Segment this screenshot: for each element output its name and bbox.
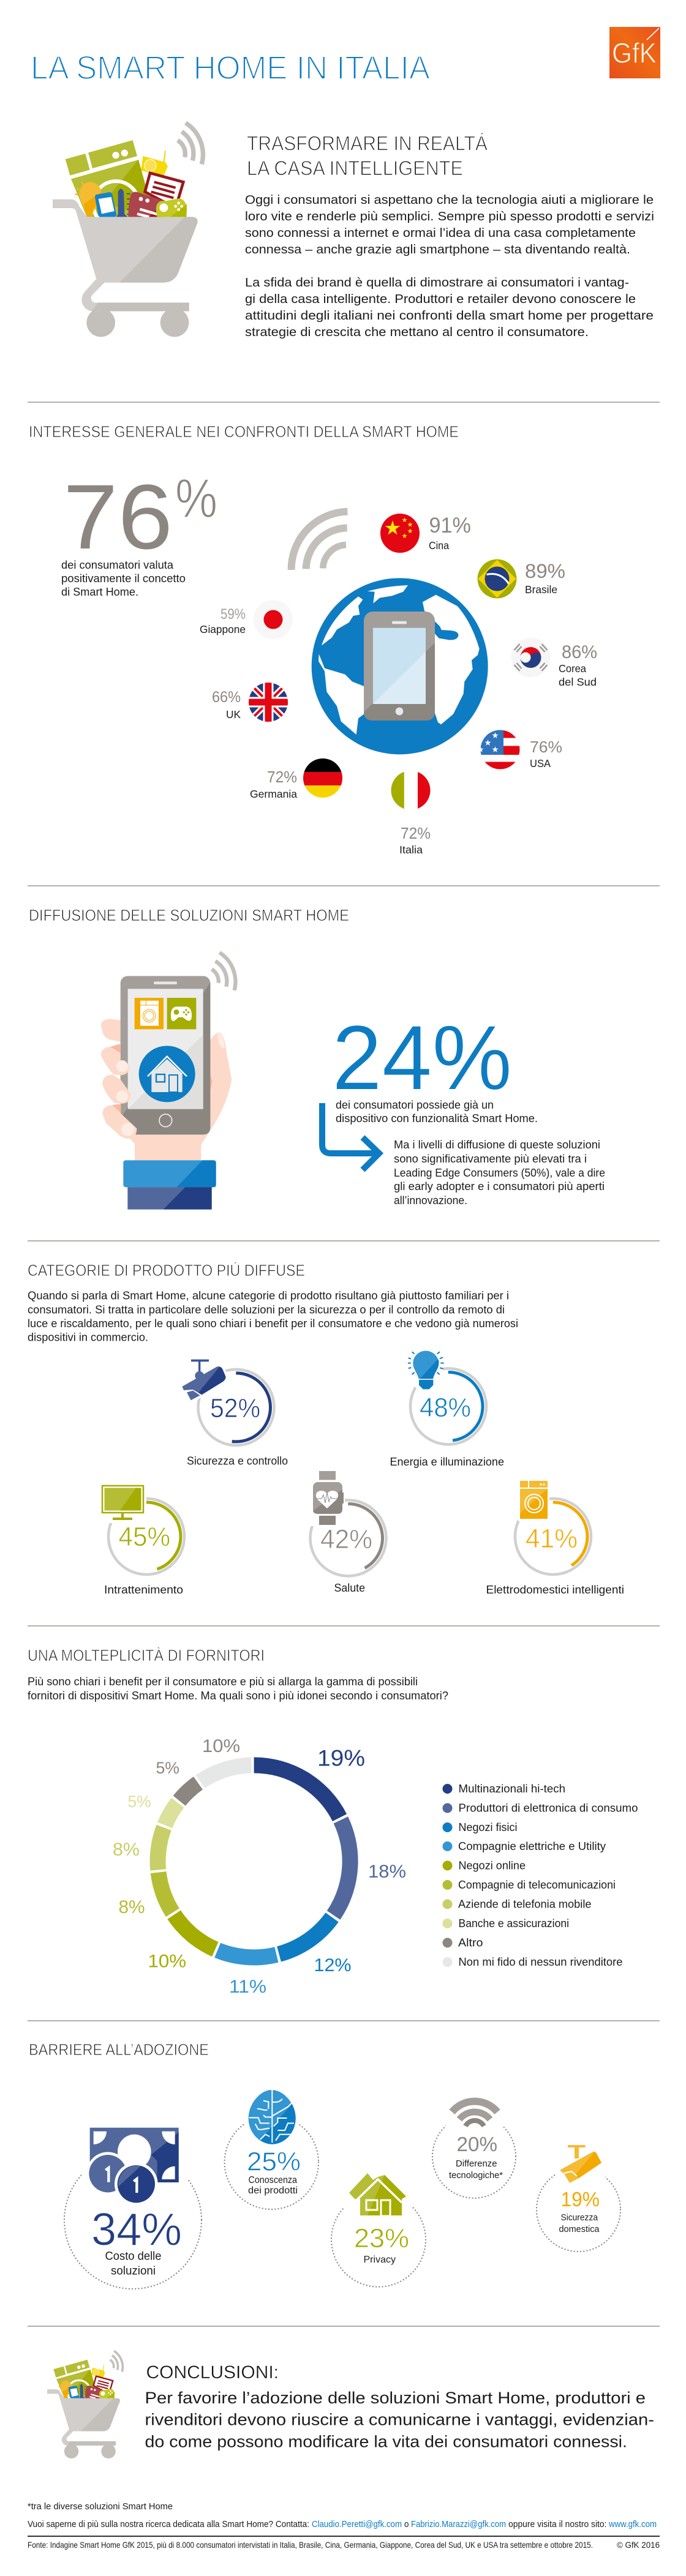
icon: smart watch [311,1470,345,1526]
flag: Brasile [478,560,517,599]
text: categorie intro: Quando si parla di Smart Home, alcune categorie di prodotto risultano già piuttosto familiari per i [28,1289,509,1301]
donut value labels: 5% [156,1759,179,1777]
contact line [28,2520,657,2529]
donut legend: Negozi online [458,1859,526,1872]
donut legend: Altro [458,1936,483,1949]
contact line: oppure visita il nostro sito: [508,2520,606,2529]
donut value labels: 8% [113,1840,140,1860]
icon: brain [244,2086,300,2147]
conclusions text: rivenditori devono riuscire a comunicarne i vantaggi, evidenzian- [145,2411,654,2429]
donut value labels: 5% [127,1792,151,1811]
icon: banknote and coins [81,2122,188,2206]
ring: elettrodomestici 41% [486,1499,624,1596]
text: categorie intro [28,1289,518,1343]
barrier: costo delle soluzioni 34% [91,2204,182,2277]
donut legend [442,1782,638,1968]
barrier: privacy 23%: 23% [354,2223,409,2253]
donut chart [158,1765,350,1958]
stat: 76%: % [175,468,217,530]
source line: Fonte: Indagine Smart Home GfK 2015, più di 8.000 consumatori intervistati in Italia, Brasile, Cina, Germania, Giappone, Corea del Sud, UK e USA tra settembre e ottobre 2015. [28,2540,593,2550]
icon: light bulb [408,1347,444,1391]
arrow [322,1103,379,1170]
label: Cina [429,514,471,552]
flag: Italia [391,771,430,809]
conclusions text: do come possono modificare la vita dei consumatori connessi. [145,2433,627,2451]
donut legend: Multinazionali hi-tech [458,1782,565,1795]
barrier: costo delle soluzioni 34%: soluzioni [111,2265,156,2277]
label: Giappone: 59% [221,606,246,623]
barrier: conoscenza dei prodotti 25%: Conoscenza [249,2175,297,2185]
logo: GfK [609,27,660,78]
ring: salute 42%: 42% [320,1524,372,1554]
text: 24% caption [336,1098,538,1125]
donut legend: Produttori di elettronica di consumo [458,1801,638,1814]
flag: Giappone [254,600,293,639]
donut value labels: 19% [317,1746,365,1770]
text: 24% caption: dispositivo con funzionalità Smart Home. [336,1112,538,1125]
text: leading edge consumers: sono significativamente più elevati tra i [394,1152,587,1165]
label: Cina: Cina [429,539,449,552]
barrier: privacy 23%: Privacy [364,2255,396,2265]
flag: Germania [303,758,343,798]
label: Italia [399,824,431,856]
icon: wifi arcs [292,512,347,570]
text: leading edge consumers: Ma i livelli di diffusione di queste soluzioni [394,1138,600,1151]
ring: elettrodomestici 41%: 41% [526,1524,578,1554]
label: USA: 76% [530,738,562,756]
title: LA SMART HOME IN ITALIA [31,50,430,86]
icon: wifi up [446,2094,503,2132]
conclusions heading: CONCLUSIONI: [146,2362,279,2383]
intro text: La sfida dei brand è quella di dimostrare ai consumatori i vantag- [245,275,629,290]
logo: GfK: GfK [612,37,657,69]
stat: 24%: 24% [332,1006,512,1109]
text: 24% caption: dei consumatori possiede già un [336,1098,494,1111]
label: Corea del Sud: del Sud [559,676,597,688]
heading: interesse generale: INTERESSE GENERALE NEI CONFRONTI DELLA SMART HOME [29,422,459,441]
donut value labels: 8% [119,1897,145,1917]
contact line: Claudio.Peretti@gfk.com [312,2520,402,2529]
icon: shopping cart with smart devices [53,123,203,337]
donut legend: Non mi fido di nessun rivenditore [458,1955,622,1968]
donut value labels [113,1736,406,1997]
donut legend: Negozi fisici [458,1821,517,1833]
label: Brasile: Brasile [525,583,557,596]
intro heading [247,132,488,179]
ring: energia e illuminazione 48%: 48% [420,1393,471,1423]
flag: USA [480,730,519,769]
stat: 76%: positivamente il concetto [61,572,186,585]
flag: Cina [380,514,420,553]
contact line: Fabrizio.Marazzi@gfk.com [411,2520,506,2529]
intro text: attitudini degli italiani nei confronti della smart home per progettare [245,309,654,323]
ring: energia e illuminazione 48% [390,1369,504,1468]
stat: 76%: 76 [63,465,173,568]
label: Giappone: Giappone [200,623,246,635]
icon: security camera [182,1360,225,1400]
barrier: sicurezza domestica 19%: 19% [561,2188,600,2211]
text: leading edge consumers: gli early adopter e i consumatori più aperti [394,1180,605,1193]
barrier: differenze tecnologiche 20%: 20% [457,2133,497,2155]
flag: Corea del Sud [511,638,550,677]
label: Giappone [200,606,246,635]
intro text: Oggi i consumatori si aspettano che la tecnologia aiuti a migliorare le [245,193,654,207]
donut legend: Compagnie elettriche e Utility [458,1840,606,1852]
barrier: differenze tecnologiche 20%: Differenze [456,2159,497,2169]
icon: washing machine [518,1479,549,1521]
text: leading edge consumers [394,1138,605,1207]
dotted circles [64,2115,620,2289]
label: Brasile [525,560,565,596]
text: categorie intro: dispositivi in commercio. [28,1331,148,1343]
ring: sicurezza e controllo 52%: Sicurezza e controllo [187,1455,288,1467]
label: Italia: 72% [401,824,431,842]
heading: barriere: BARRIERE ALL’ADOZIONE [29,2040,209,2059]
contact line: www.gfk.com [608,2520,657,2529]
text: fornitori intro [28,1675,448,1702]
ring: intrattenimento 45%: 45% [119,1522,170,1552]
barrier: costo delle soluzioni 34%: 34% [91,2204,182,2255]
heading: fornitori: UNA MOLTEPLICITÀ DI FORNITORI [28,1646,265,1664]
text: fornitori intro: Più sono chiari i benefit per il consumatore e più si allarga la gamma di possibili [28,1675,418,1688]
intro text: connessa – anche grazie agli smartphone – sta diventando realtà. [245,242,630,256]
contact line: Vuoi saperne di più sulla nostra ricerca dedicata alla Smart Home? Contatta: [28,2520,309,2529]
donut value labels: 10% [202,1736,240,1756]
icon: small shopping cart [47,2351,123,2458]
text: categorie intro: luce e riscaldamento, per le quali sono chiari i benefit per il consumatore e che vedono già numerosi [28,1317,518,1330]
intro heading: TRASFORMARE IN REALTÁ [247,132,488,154]
ring: sicurezza e controllo 52%: 52% [210,1393,260,1423]
label: Germania: 72% [267,768,297,786]
heading: categorie: CATEGORIE DI PRODOTTO PIÚ DIFFUSE [28,1261,305,1279]
label: Corea del Sud: Corea [559,662,586,675]
intro text: gi della casa intelligente. Produttori e retailer devono conoscere le [245,292,636,306]
intro text: strategie di crescita che mettano al centro il consumatore. [245,325,589,339]
intro heading: LA CASA INTELLIGENTE [247,157,463,179]
intro text: loro vite e renderle più semplici. Sempre più spesso prodotti e servizi [245,209,654,223]
label: Corea del Sud: 86% [562,642,597,662]
flag: UK [248,682,288,722]
text: leading edge consumers: Leading Edge Consumers (50%), vale a dire [394,1166,605,1179]
label: Cina: 91% [429,514,471,537]
donut value labels: 11% [229,1977,266,1997]
intro text [245,193,654,339]
label: UK: 66% [212,689,241,706]
barrier: conoscenza dei prodotti 25% [247,2147,301,2196]
contact line: o [404,2520,409,2529]
icon: house [344,2170,412,2218]
donut value labels: 12% [314,1955,352,1975]
label: Germania: Germania [250,788,297,800]
stat: 76%: dei consumatori valuta [61,558,174,571]
text: fornitori intro: fornitori di dispositivi Smart Home. Ma quali sono i più idonei secondo i consumatori? [28,1689,448,1702]
ring: intrattenimento 45% [104,1499,184,1596]
text: leading edge consumers: all’innovazione. [394,1194,467,1207]
barrier: conoscenza dei prodotti 25%: dei prodotti [248,2185,298,2196]
barrier: costo delle soluzioni 34%: Costo delle [105,2250,162,2263]
label: UK [212,689,241,721]
label: USA [530,738,562,769]
label: Italia: Italia [399,844,423,856]
conclusions text: Per favorire l’adozione delle soluzioni Smart Home, produttori e [145,2389,646,2407]
label: Corea del Sud [559,642,597,688]
barrier: sicurezza domestica 19%: domestica [559,2224,600,2234]
label: Brasile: 89% [525,560,565,582]
ring: salute 42%: Salute [334,1581,365,1594]
donut value labels: 18% [368,1862,406,1882]
text: categorie intro: consumatori. Si tratta in particolare delle soluzioni per la sicurezza o per il controllo da remoto di [28,1303,505,1316]
conclusions text [145,2389,654,2451]
donut legend: Compagnie di telecomunicazioni [458,1878,616,1891]
ring: elettrodomestici 41%: Elettrodomestici intelligenti [486,1583,624,1596]
barrier: differenze tecnologiche 20%: tecnologiche* [449,2171,503,2181]
barrier: conoscenza dei prodotti 25%: 25% [247,2147,301,2177]
barrier: sicurezza domestica 19%: Sicurezza [561,2212,598,2223]
donut legend: Aziende di telefonia mobile [458,1898,592,1910]
donut value labels: 10% [148,1952,186,1971]
icon: security camera yellow [556,2143,605,2187]
heading: diffusione: DIFFUSIONE DELLE SOLUZIONI SMART HOME [29,906,349,924]
icon: hand holding phone [101,953,235,1210]
barrier: sicurezza domestica 19% [559,2188,600,2234]
intro text: sono connessi a internet e ormai l’idea di una casa completamente [245,226,636,240]
label: USA: USA [530,757,551,769]
ring: intrattenimento 45%: Intrattenimento [104,1583,183,1596]
label: Germania [250,768,297,800]
stat: 76%: di Smart Home. [61,585,138,598]
globe with phone [312,578,488,754]
ring: sicurezza e controllo 52% [187,1369,288,1467]
label: UK: UK [226,708,241,721]
footnote: *tra le diverse soluzioni Smart Home [28,2502,173,2512]
ring: energia e illuminazione 48%: Energia e illuminazione [390,1455,504,1468]
ring: salute 42% [310,1500,386,1594]
donut legend: Banche e assicurazioni [458,1917,569,1930]
source line: © GfK 2016 [617,2540,660,2550]
icon: monitor [99,1483,146,1523]
barrier: differenze tecnologiche 20% [449,2133,503,2181]
stat: 76% [61,465,217,598]
